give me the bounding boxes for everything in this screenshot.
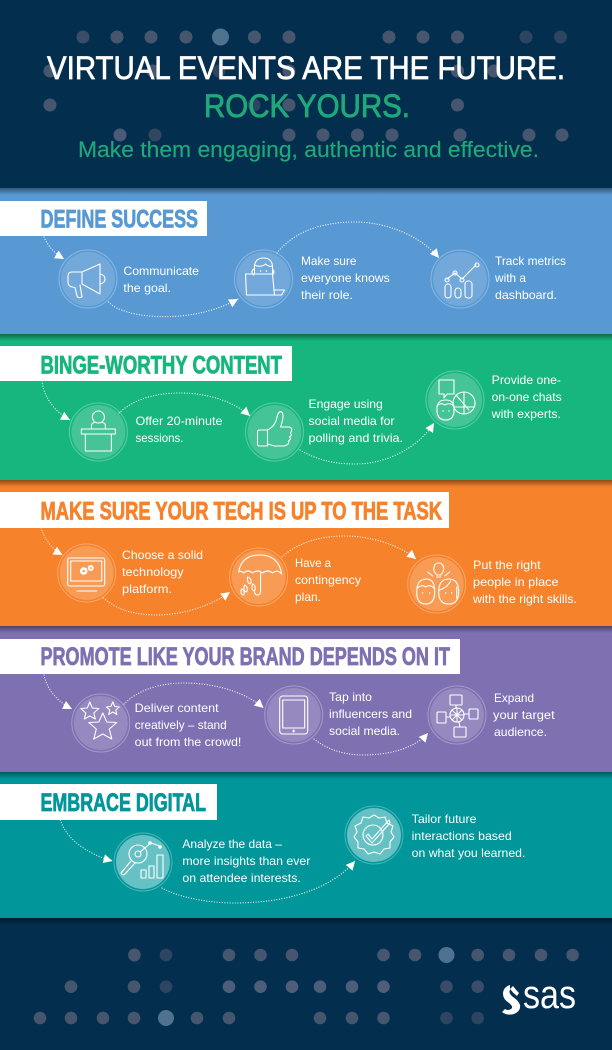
text: have a contingency plan: plan. [295, 590, 321, 604]
heading [0, 639, 460, 674]
text: have a contingency plan: Have a [295, 556, 331, 570]
heading [0, 492, 449, 528]
icon: magnifier and chart [114, 833, 172, 891]
text: deliver content creatively [135, 701, 241, 749]
text: choose a solid technology platform: platform. [122, 582, 172, 596]
title [47, 50, 565, 162]
text: communicate the goal: the goal. [123, 281, 171, 295]
text: provide one-on-one chats: on-one chats [492, 390, 562, 404]
text: tap into influencers: Tap into [329, 690, 372, 704]
subtitle: Make them engaging, authentic and effective. [78, 137, 539, 162]
text: provide one-on-one chats [491, 373, 562, 421]
text: analyze the data: Analyze the data – [182, 837, 282, 851]
footer dot pattern [34, 947, 579, 1026]
text: communicate the goal: Communicate [123, 264, 199, 278]
text: track metrics: with a [494, 271, 526, 285]
icon: globe network [428, 686, 486, 744]
arrows [41, 528, 416, 615]
text: have a contingency plan [295, 556, 361, 604]
panel: promote your brand [0, 626, 612, 772]
icon: two people with idea [408, 555, 466, 613]
text: offer 20-minute sessions [136, 414, 223, 445]
band [0, 334, 612, 480]
text: offer 20-minute sessions: Offer 20-minute [136, 414, 223, 428]
text: track metrics: Track metrics [495, 254, 566, 268]
text: deliver content creatively: Deliver content [135, 701, 219, 715]
text: make sure everyone knows: everyone knows [301, 271, 390, 285]
band [0, 626, 612, 772]
text: make sure everyone knows: Make sure [301, 254, 357, 268]
band [0, 480, 612, 626]
footer [0, 918, 612, 1050]
text: tap into influencers: influencers and [329, 707, 412, 721]
title line 2: ROCK YOURS. [204, 88, 410, 124]
title line 1: VIRTUAL EVENTS ARE THE FUTURE. [47, 50, 565, 86]
text: expand your target audience: your target [493, 708, 555, 722]
icon: dashboard [431, 250, 489, 308]
text: tap into influencers: social media. [329, 724, 400, 738]
text: choose a solid technology platform: technology [122, 565, 184, 579]
heading [0, 346, 292, 381]
heading: BINGE-WORTHY CONTENT [40, 351, 282, 379]
icon: chat with experts [426, 371, 484, 429]
arrows [44, 222, 439, 317]
logo: sas [502, 973, 576, 1017]
band [0, 188, 612, 334]
text: expand your target audience: audience. [494, 725, 547, 739]
text: track metrics [494, 254, 566, 302]
icon: check badge [345, 806, 403, 864]
icon: monitor with gears [58, 544, 116, 602]
text: deliver content creatively: creatively – stand [135, 718, 227, 732]
text: tailor future interactions: interactions based [412, 829, 512, 843]
text: make sure everyone knows: their role. [301, 288, 353, 302]
text: put the right people [472, 558, 577, 606]
icon: person at laptop [234, 250, 292, 308]
text: have a contingency plan: contingency [295, 573, 361, 587]
panel: binge-worthy content [0, 334, 612, 480]
footer band [0, 918, 612, 1050]
icon: stars [72, 694, 130, 752]
icon: tablet [265, 686, 323, 744]
panel: tech up to the task [0, 480, 612, 626]
text: tailor future interactions [412, 812, 525, 860]
text: put the right people: Put the right [473, 558, 541, 572]
icon: speaker at podium [69, 403, 127, 461]
heading: EMBRACE DIGITAL [40, 789, 206, 817]
heading: MAKE SURE YOUR TECH IS UP TO THE TASK [40, 497, 442, 525]
text: analyze the data [182, 837, 310, 885]
header dot pattern [44, 28, 568, 142]
text: expand your target audience [493, 691, 555, 739]
text: tailor future interactions: on what you learned. [412, 846, 525, 860]
panel: embrace digital [0, 772, 612, 918]
band [0, 772, 612, 918]
text: engage using social media: polling and trivia. [308, 431, 403, 445]
text: provide one-on-one chats: Provide one- [492, 373, 561, 387]
text: engage using social media: social media for [308, 414, 394, 428]
text: offer 20-minute sessions: sessions. [136, 431, 184, 445]
text: analyze the data: on attendee interests. [182, 871, 301, 885]
heading [0, 201, 207, 236]
panel: define success [0, 188, 612, 334]
text: track metrics: dashboard. [495, 288, 557, 302]
text: engage using social media: Engage using [308, 397, 383, 411]
text: deliver content creatively: out from the crowd! [135, 735, 241, 749]
heading: PROMOTE LIKE YOUR BRAND DEPENDS ON IT [40, 643, 450, 671]
text: put the right people: with the right skills. [472, 592, 577, 606]
text: provide one-on-one chats: with experts. [491, 407, 561, 421]
icon: megaphone [59, 250, 117, 308]
icon: umbrella and rain [230, 548, 288, 606]
text: analyze the data: more insights than ever [182, 854, 310, 868]
text: engage using social media [308, 397, 403, 445]
text: put the right people: people in place [473, 575, 559, 589]
text: choose a solid technology platform: Choose a solid [122, 548, 203, 562]
text: communicate the goal [123, 264, 199, 295]
text: tap into influencers [329, 690, 412, 738]
heading: DEFINE SUCCESS [40, 205, 198, 233]
arrows [44, 675, 428, 755]
arrows [42, 381, 434, 464]
text: expand your target audience: Expand [494, 691, 534, 705]
logo: sas: sas [523, 973, 576, 1017]
arrows [60, 820, 355, 903]
text: make sure everyone knows [301, 254, 390, 302]
text: choose a solid technology platform [122, 548, 203, 596]
icon: thumbs up [246, 403, 304, 461]
heading [0, 784, 217, 820]
text: tailor future interactions: Tailor future [412, 812, 477, 826]
